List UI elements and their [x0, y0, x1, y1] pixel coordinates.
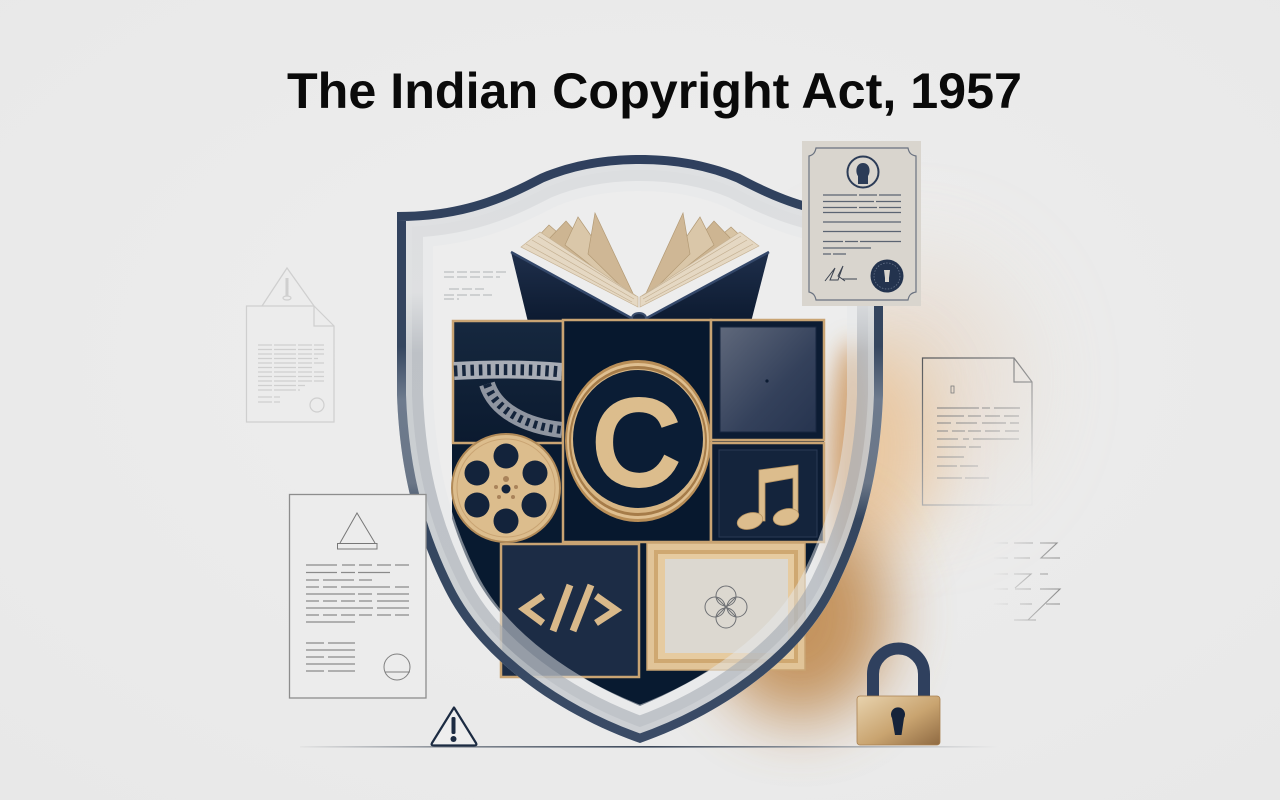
copyright rings [565, 360, 711, 522]
icon: code brackets [524, 585, 616, 631]
title: The Indian Copyright Act, 1957 [287, 63, 1022, 119]
text snippet inside shield [444, 272, 506, 299]
faint document with warning triangle [246, 268, 334, 422]
portrait medallion [848, 156, 878, 188]
document with triangle [290, 494, 426, 698]
tile: framed artwork [647, 543, 805, 670]
certificate text lines [823, 195, 901, 254]
navy panel behind the tiles [452, 441, 824, 706]
shield base [691, 291, 858, 692]
infographic canvas [246, 72, 1062, 766]
warm glow behind shield [710, 265, 1015, 720]
icon: music notes [735, 465, 801, 532]
right fading document [922, 358, 1032, 505]
tile: film strip [453, 321, 563, 443]
certificate border [809, 148, 916, 300]
icon: warning triangle [432, 708, 476, 746]
ground line [300, 746, 1000, 748]
tile: music note [711, 443, 824, 542]
triangle mark [338, 513, 377, 549]
book covers [511, 252, 638, 322]
open book [511, 213, 769, 323]
document stamp [384, 654, 410, 680]
certificate [802, 141, 921, 306]
signature [825, 266, 857, 281]
book pages [530, 213, 750, 302]
glass rim of shield [397, 155, 883, 743]
fading z-shaped marks [994, 543, 1060, 620]
tile: copyright centre [563, 320, 711, 542]
film strip curve [487, 384, 562, 430]
icon: ornament [705, 586, 747, 628]
icon: padlock [857, 648, 940, 745]
icon: film reel [452, 434, 560, 542]
tile: dark blue square [711, 320, 824, 440]
seal [870, 260, 904, 292]
peach tint inside shield [829, 340, 877, 600]
document text lines [306, 565, 409, 671]
tile: code [501, 544, 639, 677]
copyright letter: C [593, 376, 679, 510]
